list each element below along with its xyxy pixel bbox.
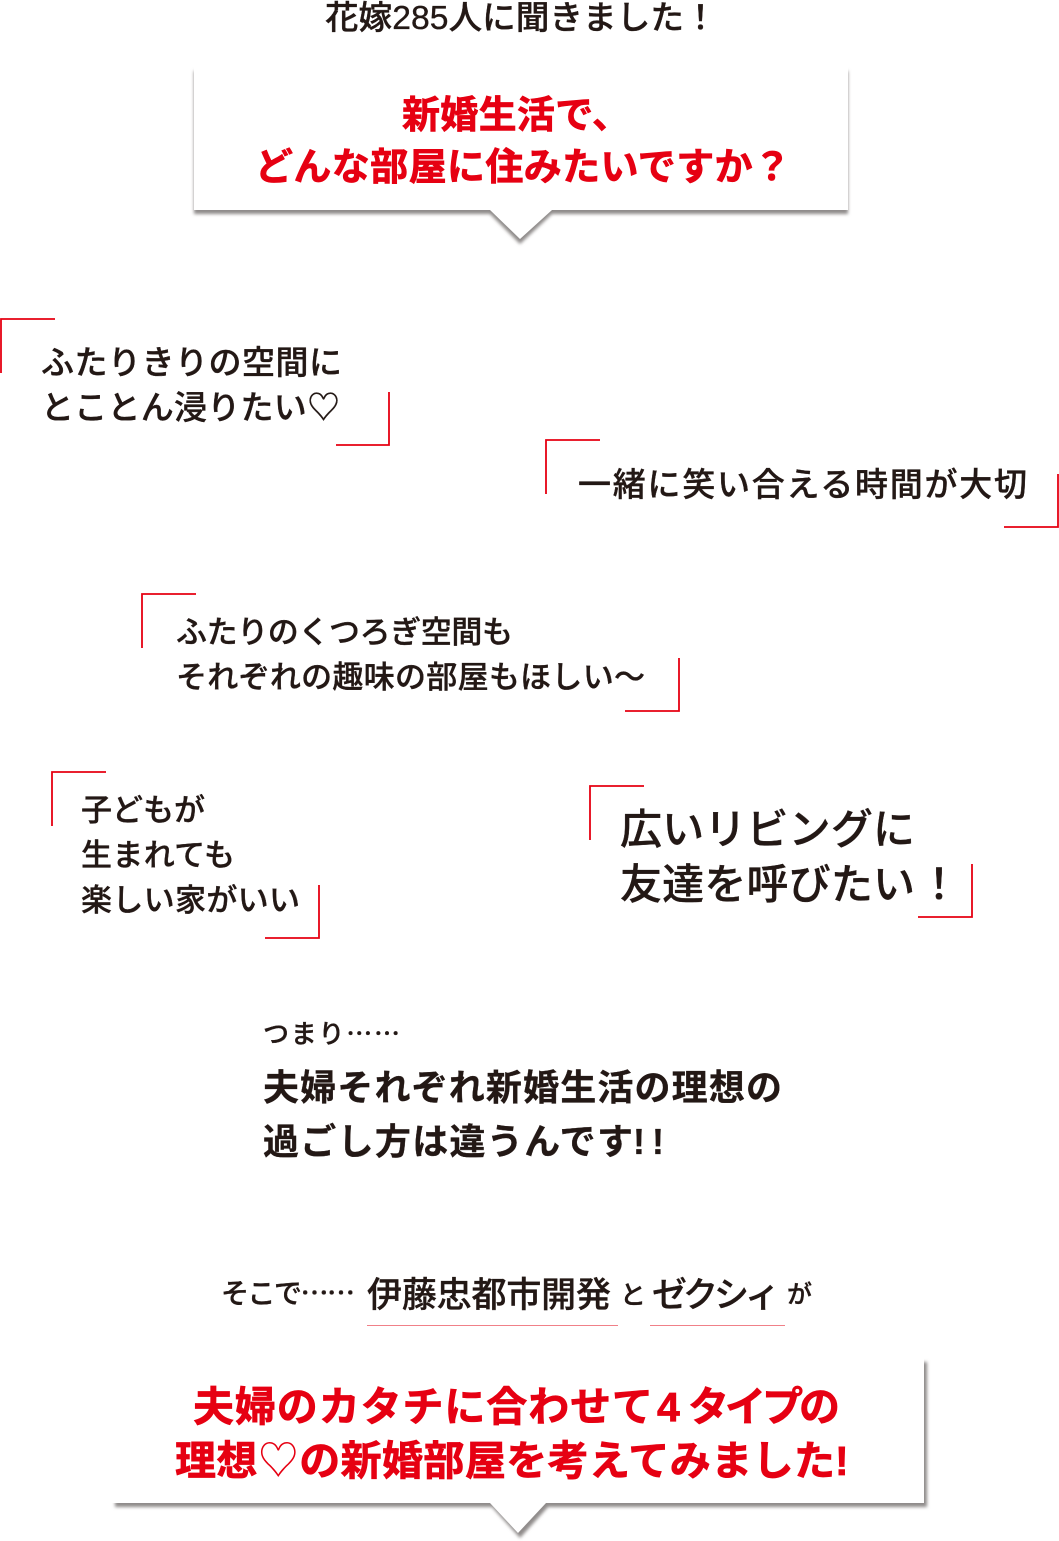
quote 4: 生まれても: [81, 838, 235, 873]
quote 4: 楽しい家がいい: [81, 883, 300, 918]
summary text: !: [633, 1121, 645, 1162]
quote 5: [590, 786, 972, 917]
quote 5: ！: [918, 861, 960, 908]
summary text: !: [652, 1121, 664, 1162]
survey heading: ！: [684, 0, 717, 36]
conclusion text: タイプの: [688, 1384, 840, 1430]
conclusion text: !: [835, 1438, 849, 1484]
conclusion text: 理想♡の新婚部屋を考えてみました: [175, 1438, 835, 1484]
quote 3: ふたりのくつろぎ空間も: [176, 615, 513, 650]
quote 5: 広いリビングに: [620, 806, 915, 853]
quote 3: それぞれの趣味の部屋もほしい〜: [176, 660, 645, 695]
quote 5: 友達を呼びたい: [620, 861, 915, 908]
question callout box: [194, 66, 848, 244]
question text: 新婚生活で、: [402, 95, 630, 137]
quote 1: [1, 319, 389, 445]
survey heading: 花嫁285人に聞きました: [325, 0, 684, 36]
conclusion text: [175, 1384, 849, 1484]
quote 4: 子どもが: [81, 793, 205, 828]
question text: [255, 95, 791, 189]
quote 1: とことん浸りたい♡: [41, 389, 340, 426]
conclusion callout box: [109, 1358, 927, 1538]
sponsors line: 伊藤忠都市開発: [367, 1276, 611, 1315]
sponsors line: と: [620, 1280, 646, 1310]
quote 3: [142, 594, 679, 711]
quote 4: [52, 772, 319, 938]
question text: どんな部屋に住みたいですか？: [255, 147, 791, 189]
quote 2: [546, 440, 1058, 527]
sponsors line: [221, 1272, 812, 1326]
conclusion text: 4: [657, 1384, 680, 1430]
summary text: 夫婦それぞれ新婚生活の理想の: [263, 1067, 782, 1108]
summary text: つまり……: [263, 1014, 400, 1051]
quote 2: 一緒に笑い合える時間が大切: [578, 466, 1027, 503]
sponsors line: が: [787, 1281, 812, 1309]
conclusion text: 夫婦のカタチに合わせて: [193, 1384, 653, 1430]
summary text: [263, 1014, 782, 1162]
quote 1: ふたりきりの空間に: [41, 344, 342, 381]
sponsors line: ゼクシィ: [652, 1276, 780, 1315]
summary text: 過ごし方は違うんです: [263, 1121, 633, 1162]
sponsors line: そこで……: [221, 1272, 355, 1312]
